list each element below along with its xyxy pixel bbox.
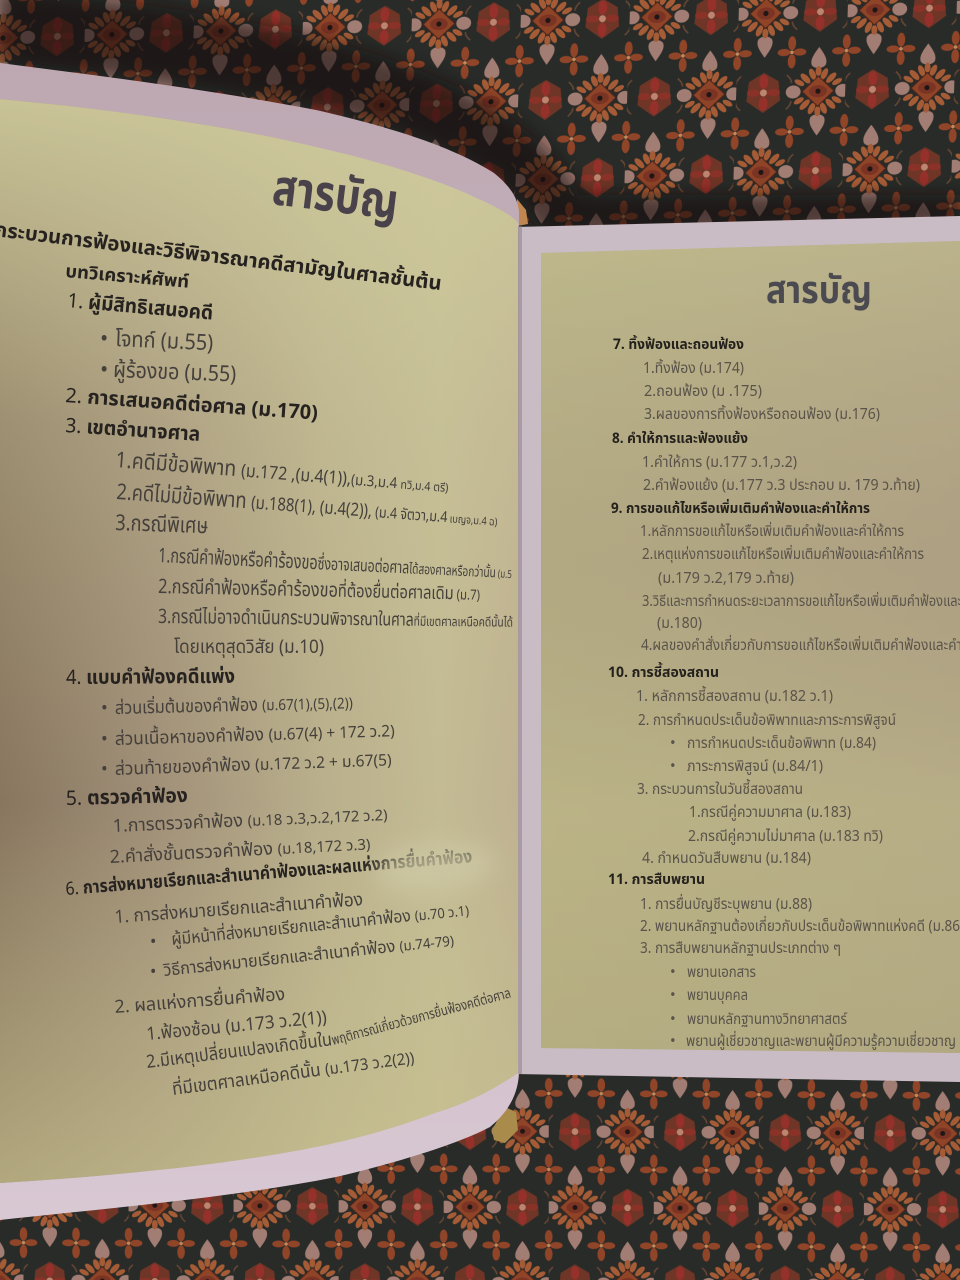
left page white margin [0, 63, 519, 1220]
section 11: • [670, 961, 676, 984]
section 10: 4. กำหนดวันสืบพยาน (ม.184) [642, 847, 811, 870]
section 9: (ม.179 ว.2,179 ว.ท้าย) [658, 567, 794, 590]
section 7: 3.ผลของการทิ้งฟ้องหรือถอนฟ้อง (ม.176) [644, 403, 880, 426]
section 3: 1.คดีมีข้อพิพาท (ม.172 ,(ม.4(1)),(ม.3,ม.4 ทวิ,ม.4 ตรี) [114, 444, 450, 502]
section 7: 7. ทิ้งฟ้องและถอนฟ้อง [613, 334, 744, 356]
section 3: 1.กรณีคำฟ้องหรือคำร้องขอซึ่งอาจเสนอต่อศาลได้สองศาลหรือกว่านั้น (ม.5 [158, 541, 513, 587]
section 11: พยานบุคคล [687, 984, 748, 1007]
section 11: 11. การสืบพยาน [608, 869, 705, 891]
section 6: 2. ผลแห่งการยื่นคำฟ้อง [114, 981, 286, 1022]
light glare on page [373, 838, 497, 898]
left page title: สารบัญ [268, 151, 403, 242]
panel: left page [0, 63, 519, 1220]
section 7 [613, 334, 880, 426]
gutter shadow [518, 226, 522, 1074]
panel: right page [515, 216, 960, 1082]
section 11: • [670, 1008, 676, 1031]
section 4: • [101, 757, 108, 784]
section 3: 2.คดีไม่มีข้อพิพาท (ม.188(1), (ม.4(2)), (ม.4 จัตวา,ม.4 เบญจ,ม.4 ฉ) [115, 476, 499, 536]
section 10: ภาระการพิสูจน์ (ม.84/1) [687, 755, 823, 778]
section 1: โจทก์ (ม.55) [115, 323, 214, 360]
section 6: ที่มีเขตศาลเหนือคดีนั้น (ม.173 ว.2(2)) [171, 1044, 416, 1104]
section 2: 2. การเสนอคดีต่อศาล (ม.170) [64, 381, 319, 429]
section 5: 1.การตรวจคำฟ้อง (ม.18 ว.3,ว.2,172 ว.2) [112, 802, 388, 841]
background: patterned fabric, top [0, 0, 960, 640]
section 9: (ม.180) [657, 612, 702, 635]
section 3 [64, 411, 513, 662]
section 10: 3. กระบวนการในวันชี้สองสถาน [637, 778, 803, 801]
section 5: 5. ตรวจคำฟ้อง [65, 781, 188, 814]
section 9: 2.เหตุแห่งการขอแก้ไขหรือเพิ่มเติมคำฟ้องและคำให้การ [642, 543, 924, 566]
section 10: 1.กรณีคู่ความมาศาล (ม.183) [689, 801, 851, 824]
left page cream panel [0, 99, 518, 1183]
section 8 [612, 428, 920, 497]
section 4: ส่วนเนื้อหาของคำฟ้อง (ม.67(4) + 172 ว.2) [114, 717, 395, 754]
section 6: • [150, 959, 156, 985]
section 9: 1.หลักการขอแก้ไขหรือเพิ่มเติมคำฟ้องและคำให้การ [640, 520, 904, 543]
section 3: 3. เขตอำนาจศาล [64, 411, 201, 450]
section 11: พยานหลักฐานทางวิทยาศาสตร์ [687, 1008, 848, 1031]
section 8: 1.คำให้การ (ม.177 ว.1,ว.2) [642, 451, 797, 474]
section 10: การกำหนดประเด็นข้อพิพาท (ม.84) [687, 732, 876, 755]
shadow cast by left page on fabric [0, 0, 960, 235]
section 7: 2.ถอนฟ้อง (ม .175) [644, 380, 762, 403]
section 10 [608, 661, 896, 870]
section 3: โดยเหตุสุดวิสัย (ม.10) [174, 633, 324, 662]
section 6: พฤติการณ์เกี่ยวด้วยการยื่นฟ้องคดีต่อศาล [329, 983, 514, 1052]
section 4: ส่วนท้ายของคำฟ้อง (ม.172 ว.2 + ม.67(5) [114, 747, 392, 784]
right page title: สารบัญ [766, 264, 872, 321]
section 1: ผู้ร้องขอ (ม.55) [113, 354, 237, 392]
left page subtitle: กระบวนการฟ้องและวิธีพิจารณาคดีสามัญในศาลชั้นต้น [0, 215, 443, 299]
section 11: 1. การยื่นบัญชีระบุพยาน (ม.88) [640, 893, 812, 916]
section 4: • [101, 727, 108, 754]
section 1: 1. ผู้มีสิทธิเสนอคดี [66, 286, 214, 329]
section 4: • [101, 696, 108, 723]
section 7: 1.ทิ้งฟ้อง (ม.174) [643, 357, 744, 380]
section 11: • [670, 1030, 676, 1053]
right page cream panel [541, 241, 960, 1053]
right page white margin [515, 216, 960, 1082]
term analysis heading: บทวิเคราะห์ศัพท์ [64, 259, 190, 297]
section 6: • [150, 929, 156, 955]
section 10: 10. การชี้สองสถาน [608, 661, 719, 684]
section 11: พยานเอกสาร [687, 961, 756, 984]
section 3: 3.กรณีพิเศษ [115, 507, 209, 543]
section 8: 8. คำให้การและฟ้องแย้ง [612, 428, 748, 450]
section 10: • [670, 755, 676, 778]
section 5: 2.คำสั่งชั้นตรวจคำฟ้อง (ม.18,172 ว.3) [109, 831, 371, 872]
section 5 [65, 781, 388, 872]
section 4 [66, 662, 395, 784]
section 11 [608, 869, 960, 1053]
section 9: 9. การขอแก้ไขหรือเพิ่มเติมคำฟ้องและคำให้การ [611, 498, 870, 520]
section 6: 2.มีเหตุเปลี่ยนแปลงเกิดขึ้นใน [145, 1026, 334, 1077]
section 4: 4. แบบคำฟ้องคดีแพ่ง [66, 662, 235, 693]
section 6 [64, 843, 514, 1104]
ribbon bookmark tab, top [517, 199, 528, 226]
section 9 [611, 498, 960, 657]
section 6: 1.ฟ้องซ้อน (ม.173 ว.2(1)) [145, 1005, 328, 1049]
section 11: • [670, 984, 676, 1007]
section 1: • [100, 323, 108, 356]
ribbon fringe, bottom [492, 1107, 518, 1143]
section 10: • [670, 732, 676, 755]
section 3: 2.กรณีคำฟ้องหรือคำร้องขอที่ต้องยื่นต่อศาลเดิม (ม.7) [158, 572, 480, 609]
section 10: 2.กรณีคู่ความไม่มาศาล (ม.183 ทวิ) [688, 825, 883, 848]
section 6: วิธีการส่งหมายเรียกและสำเนาคำฟ้อง (ม.74-79) [162, 928, 455, 984]
section 10: 2. การกำหนดประเด็นข้อพิพาทและภาระการพิสูจน์ [638, 709, 896, 732]
section 1: • [100, 354, 108, 387]
section 3: 3.กรณีไม่อาจดำเนินกระบวนพิจารณาในศาลที่มีเขตศาลเหนือคดีนั้นได้ [158, 602, 513, 636]
section 8: 2.คำฟ้องแย้ง (ม.177 ว.3 ประกอบ ม. 179 ว.ท้าย) [643, 474, 920, 497]
section 10: 1. หลักการชี้สองสถาน (ม.182 ว.1) [636, 685, 833, 708]
section 6: 1. การส่งหมายเรียกและสำเนาคำฟ้อง [114, 887, 364, 932]
section 6: 6. การส่งหมายเรียกและสำเนาคำฟ้องและผลแห่งการยื่นคำฟ้อง [64, 843, 473, 904]
background: patterned fabric, bottom [0, 640, 960, 1280]
section 6: ผู้มีหน้าที่ส่งหมายเรียกและสำเนาคำฟ้อง (ม.70 ว.1) [170, 897, 470, 953]
section 4: ส่วนเริ่มต้นของคำฟ้อง (ม.67(1),(5),(2)) [115, 690, 353, 723]
section 11: 3. การสืบพยานหลักฐานประเภทต่าง ๆ [640, 937, 841, 960]
section 1 [66, 286, 237, 392]
